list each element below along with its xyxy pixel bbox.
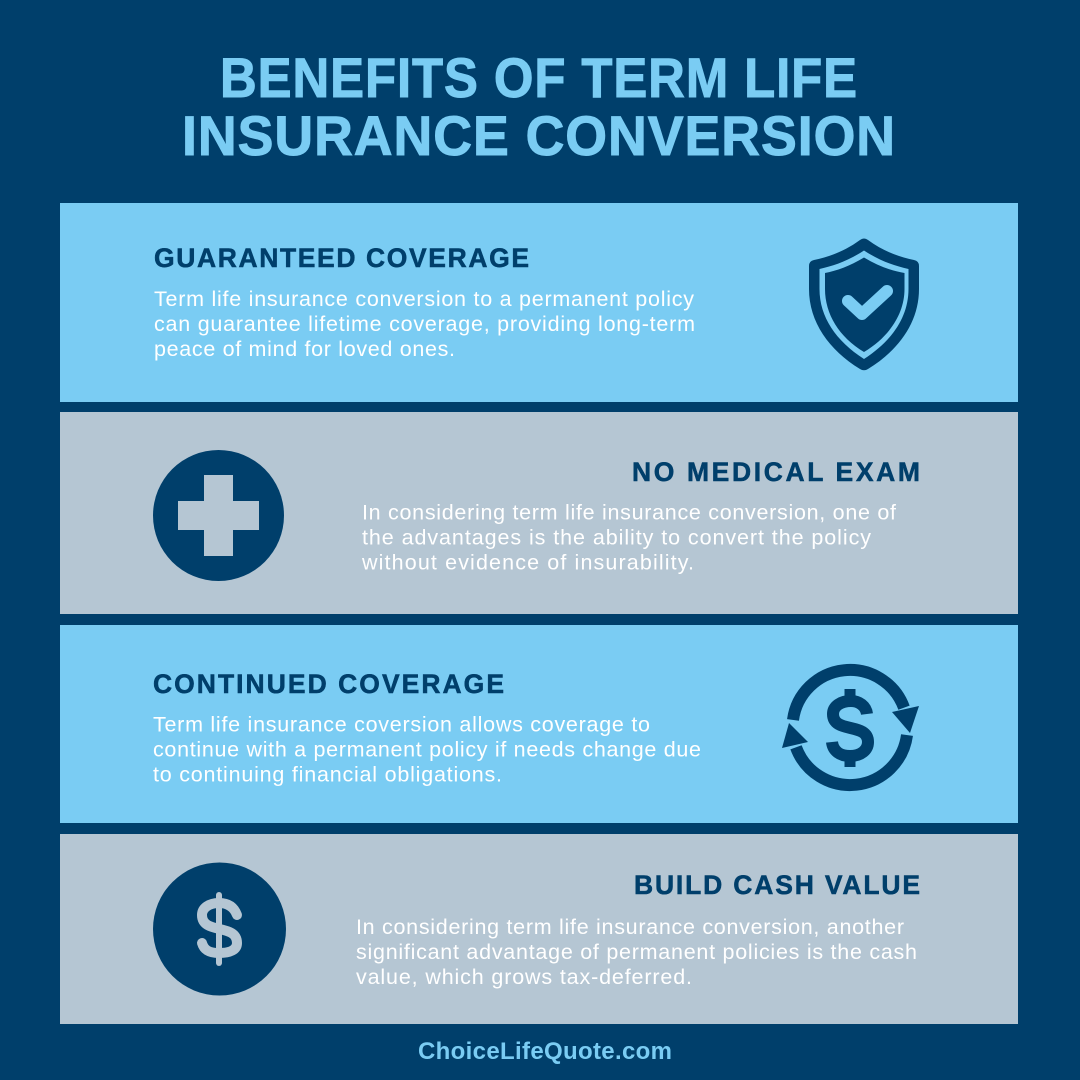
text block: no medical exam <box>361 500 896 574</box>
text block: build cash value: value, which grows tax-deferred. <box>356 965 692 989</box>
text block: no medical exam: the advantages is the ability to convert the policy <box>362 526 871 550</box>
text block: continued coverage: Term life insurance coversion allows coverage to <box>153 712 650 736</box>
icon: medical cross <box>153 450 284 581</box>
heading: guaranteed coverage: GUARANTEED COVERAGE <box>154 243 529 273</box>
title <box>182 46 896 167</box>
heading: build cash value: BUILD CASH VALUE <box>634 870 920 900</box>
text block: guaranteed coverage <box>154 287 695 361</box>
text block: build cash value: significant advantage of permanent policies is the cash <box>356 940 917 964</box>
footer: website: ChoiceLifeQuote.com <box>418 1038 672 1065</box>
heading: no medical exam: NO MEDICAL EXAM <box>632 457 920 487</box>
text block: build cash value: In considering term life insurance conversion, another <box>356 915 904 939</box>
text block: guaranteed coverage: Term life insurance conversion to a permanent policy <box>154 287 694 311</box>
heading: continued coverage: CONTINUED COVERAGE <box>153 669 504 699</box>
title: INSURANCE CONVERSION <box>182 104 896 167</box>
title: BENEFITS OF TERM LIFE <box>220 46 858 109</box>
text block: continued coverage: to continuing financial obligations. <box>153 762 502 786</box>
panel: continued coverage <box>60 625 1018 823</box>
text block: continued coverage <box>153 712 701 786</box>
panel: build cash value <box>60 834 1018 1024</box>
panel: no medical exam <box>60 412 1018 614</box>
text block: continued coverage: continue with a permanent policy if needs change due <box>153 738 701 762</box>
icon: dollar with circular arrows <box>782 670 919 785</box>
icon: shield with check <box>809 238 919 370</box>
icon: dollar coin <box>153 862 286 996</box>
text block: guaranteed coverage: can guarantee lifetime coverage, providing long-term <box>154 312 695 336</box>
text block: no medical exam: without evidence of insurability. <box>361 550 694 574</box>
text block: no medical exam: In considering term life insurance conversion, one of <box>362 500 896 524</box>
text block: build cash value <box>356 915 917 989</box>
text block: guaranteed coverage: peace of mind for loved ones. <box>154 337 455 361</box>
panel: guaranteed coverage <box>60 203 1018 402</box>
